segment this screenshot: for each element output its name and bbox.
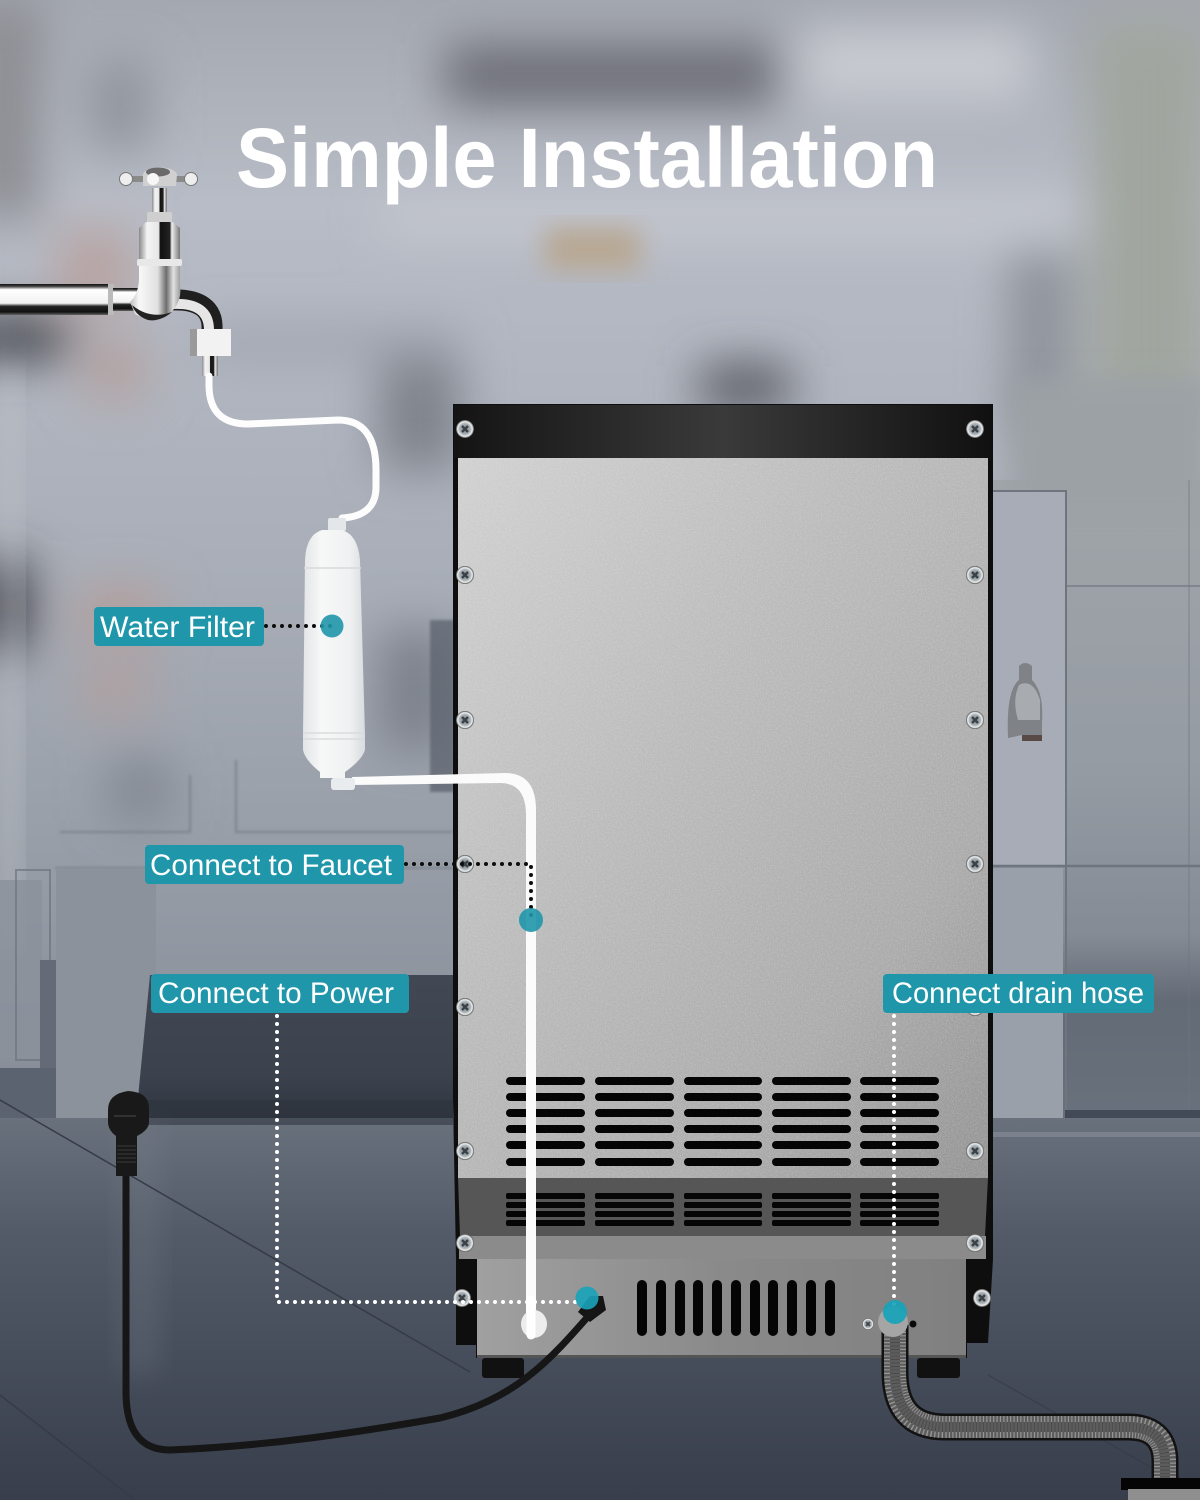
callout: water filter xyxy=(94,607,344,646)
callout: connect to faucet xyxy=(145,845,543,932)
upper vent slots xyxy=(506,1077,939,1166)
lower vent slots xyxy=(637,1280,835,1336)
icon: power cord and plug xyxy=(108,1091,592,1450)
callout: water filter: Water Filter xyxy=(100,611,255,644)
icon: corrugated drain hose xyxy=(878,1307,1165,1490)
title: Simple Installation xyxy=(236,111,938,205)
callout: connect to faucet: Connect to Faucet xyxy=(150,849,393,882)
steel panel xyxy=(458,458,988,1178)
ice maker back panel xyxy=(453,404,993,1378)
spout xyxy=(170,300,212,330)
inlet tube from faucet xyxy=(209,376,376,518)
hex collar xyxy=(139,222,180,259)
right wall tiles xyxy=(975,480,1200,1130)
floor xyxy=(0,1118,1200,1500)
screws xyxy=(453,420,991,1330)
callout: connect to power xyxy=(151,974,598,1310)
feet xyxy=(482,1358,960,1378)
supply pipe xyxy=(0,284,110,315)
icon: water filter xyxy=(303,518,365,790)
callout: connect drain hose: Connect drain hose xyxy=(892,977,1144,1010)
hex connector xyxy=(190,329,231,356)
body xyxy=(130,266,180,319)
metal strip xyxy=(459,1236,986,1259)
valve stem xyxy=(152,188,167,216)
callout: connect drain hose xyxy=(883,974,1154,1324)
lower box xyxy=(477,1259,966,1358)
top black band xyxy=(454,405,992,458)
icon: faucet xyxy=(0,167,231,376)
drain outlet xyxy=(1121,1478,1200,1500)
inlet tube on machine xyxy=(352,773,547,1338)
outer frame xyxy=(453,404,993,1358)
cross handle xyxy=(128,176,190,182)
shelf vent slots xyxy=(506,1193,939,1226)
power socket xyxy=(578,1296,606,1322)
hook on wall xyxy=(1008,663,1042,741)
drain hole xyxy=(910,1320,916,1328)
cabinet lines lower left xyxy=(55,760,453,868)
dark shelf band xyxy=(458,1178,988,1236)
callout: connect to power: Connect to Power xyxy=(158,977,394,1010)
